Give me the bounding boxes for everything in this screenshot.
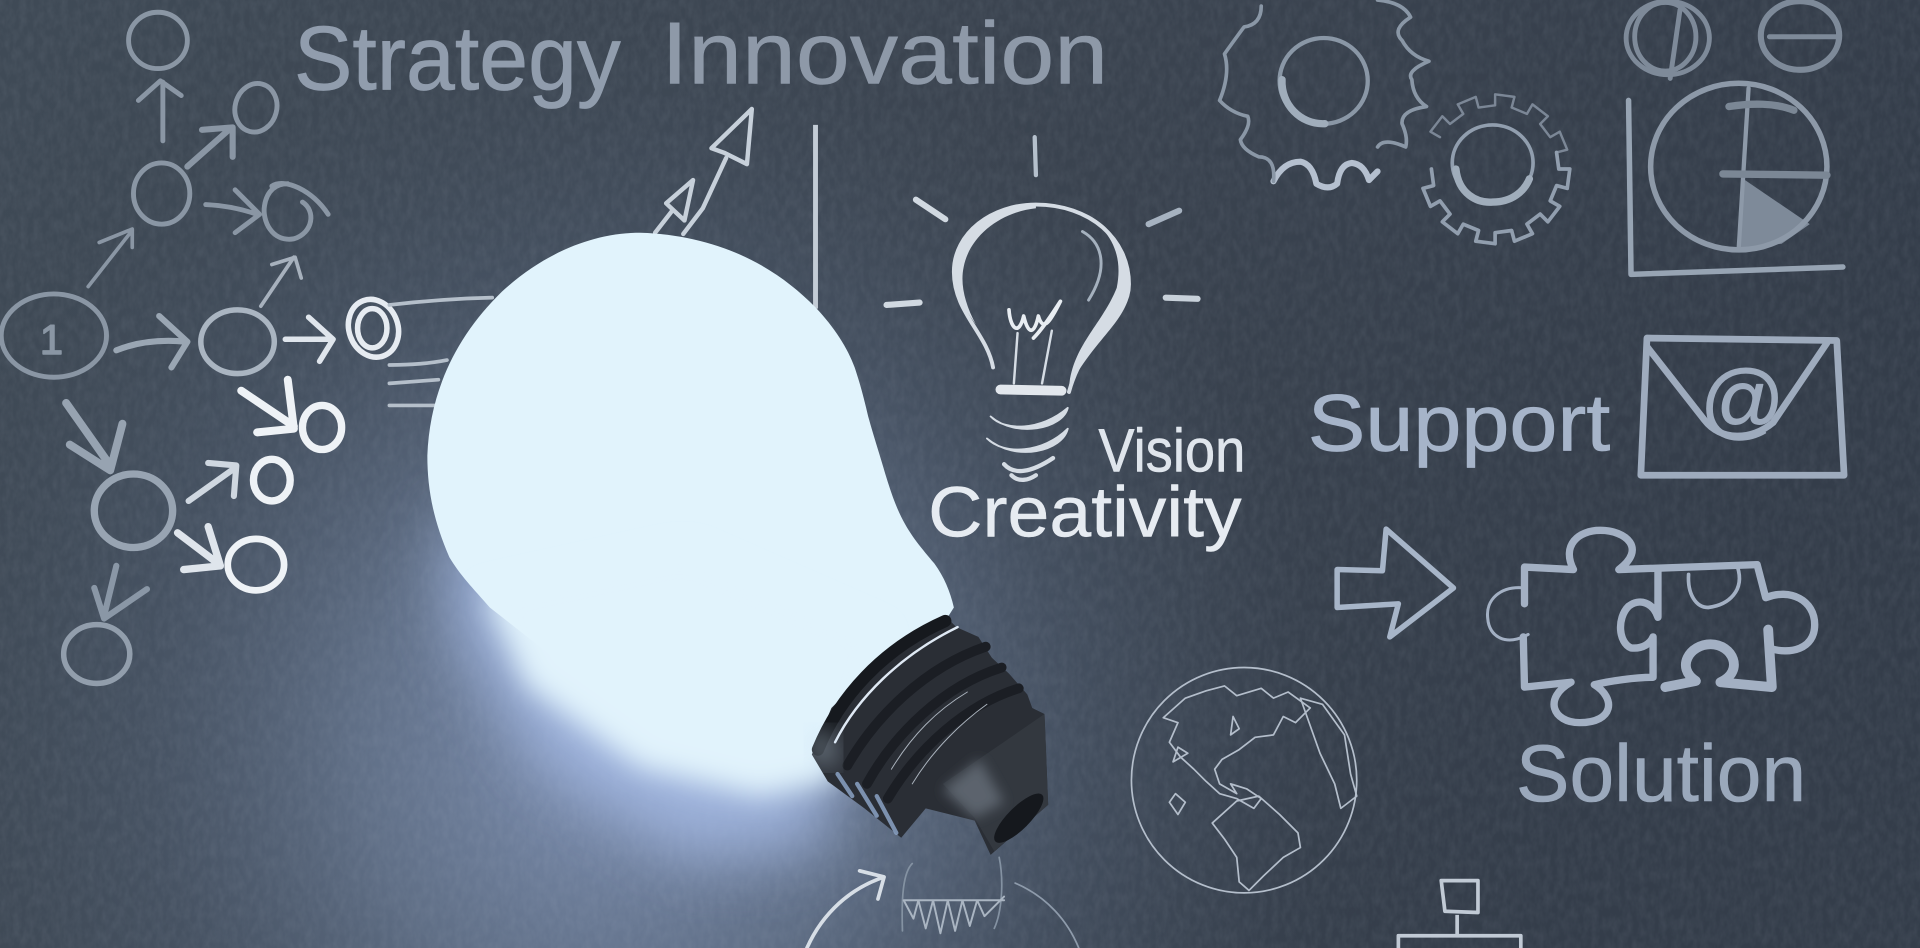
icon: puzzle pieces bbox=[1487, 530, 1815, 723]
arrow: to small ring bbox=[189, 463, 236, 501]
icon: small gear bbox=[1423, 94, 1570, 244]
curved arrow bbox=[807, 871, 884, 948]
arrow: bright down right bbox=[241, 380, 294, 432]
node: double ring circle bbox=[340, 292, 407, 364]
icon: globe bbox=[1131, 668, 1357, 893]
arrow: from numbered circle bbox=[116, 316, 187, 367]
node: top circle bbox=[129, 12, 187, 69]
thin arc bbox=[1015, 883, 1079, 948]
icon: envelope with at sign: @ bbox=[1700, 354, 1785, 447]
number 1: 1 bbox=[40, 316, 63, 363]
label: Support: Support bbox=[1308, 379, 1610, 469]
speed lines bbox=[389, 298, 492, 405]
node: lower circle bbox=[94, 474, 173, 547]
arrow: to swirl circle bbox=[206, 190, 260, 233]
chart axes bbox=[1629, 100, 1843, 274]
icon: drawn light bulb bbox=[954, 205, 1130, 480]
base: socket end bbox=[988, 787, 1050, 849]
globe: greenland and arctic islands bbox=[1169, 698, 1357, 814]
glow under bulb bbox=[447, 514, 845, 857]
faint circle bbox=[902, 857, 1002, 931]
flowchart: branching circles and arrows bbox=[1, 12, 492, 683]
icon: large gear bbox=[1220, 0, 1429, 187]
glass highlight bbox=[1082, 231, 1101, 300]
node: lower bright ring bbox=[228, 539, 284, 590]
filament bbox=[1009, 301, 1060, 338]
metal screw base bbox=[809, 617, 1050, 855]
arrow: thin up right bbox=[88, 229, 132, 287]
icon: pie chart with axes bbox=[1629, 83, 1843, 274]
base: highlight and threads bbox=[818, 621, 1019, 833]
node: small bright ring bbox=[253, 459, 290, 501]
vertical chart line bbox=[814, 125, 818, 309]
arrow: thin to swirl bbox=[261, 257, 301, 306]
node: second circle bbox=[133, 163, 190, 224]
label: Creativity: Creativity bbox=[928, 473, 1242, 552]
node: swirl circle bbox=[264, 183, 328, 239]
arrow: to bright circle bbox=[285, 317, 333, 361]
label: Vision: Vision bbox=[1098, 417, 1245, 485]
icon: two small scribbled circles bbox=[1626, 1, 1839, 78]
sketched growth arrow bbox=[655, 109, 752, 234]
bulb glass bbox=[954, 205, 1129, 392]
globe: south america bbox=[1212, 796, 1300, 890]
base: cone bbox=[943, 714, 1048, 851]
arrow: up bbox=[138, 81, 181, 141]
bulb cap bar bbox=[1000, 389, 1062, 391]
node: numbered circle bbox=[1, 294, 107, 377]
light rays bbox=[887, 137, 1198, 305]
pie wedge bbox=[1739, 180, 1810, 249]
arrow: up right bbox=[187, 127, 233, 167]
icon: outlined arrow bbox=[1337, 529, 1453, 637]
label: Solution: Solution bbox=[1516, 729, 1806, 819]
heading: Innovation: Innovation bbox=[661, 3, 1108, 102]
filament stems bbox=[1014, 331, 1052, 383]
arrow: large down right bbox=[66, 403, 122, 470]
scribble bbox=[904, 897, 1004, 933]
node: bottom circle bbox=[64, 625, 130, 683]
thick side of glass bbox=[1069, 211, 1130, 387]
icon: org chart bbox=[1398, 881, 1521, 948]
node: upper right circle bbox=[229, 79, 282, 137]
icon: envelope with at sign bbox=[1641, 338, 1844, 475]
glowing light bulb bbox=[427, 233, 954, 796]
globe: north america bbox=[1163, 686, 1310, 808]
sketch: bottom bulb and arrow bbox=[807, 857, 1079, 948]
node: center circle bbox=[201, 310, 274, 374]
cap threads bbox=[991, 408, 1068, 429]
arrow: to lower bright ring bbox=[178, 527, 220, 570]
heading: Strategy: Strategy bbox=[294, 8, 621, 109]
arrow: down left bbox=[94, 566, 147, 619]
node: bright circle bbox=[302, 405, 342, 450]
